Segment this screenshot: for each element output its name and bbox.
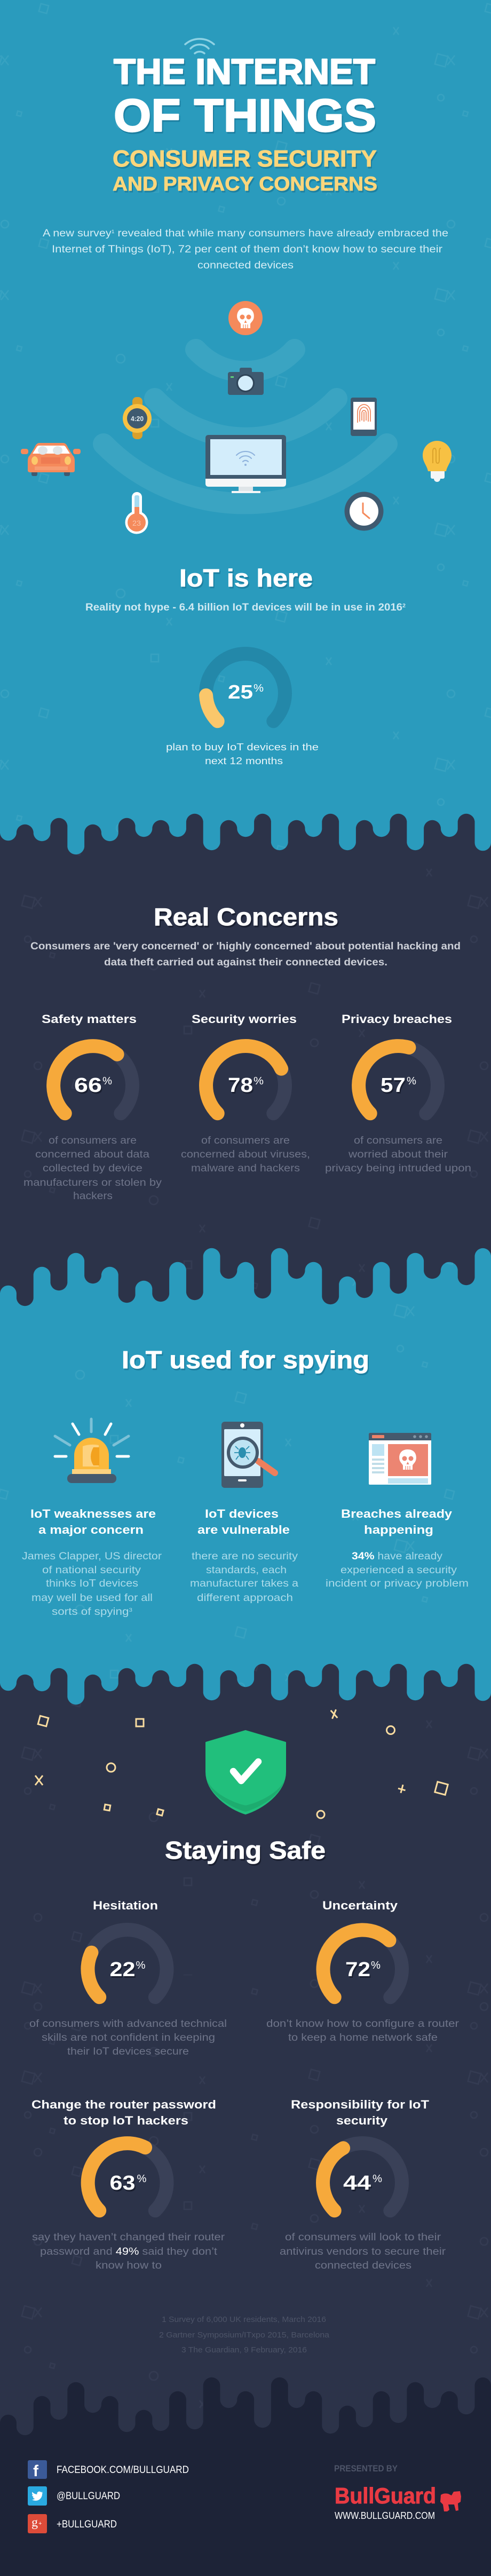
icon: thermometer: 23 bbox=[132, 519, 141, 527]
gauge: 57 percent: % bbox=[407, 1075, 416, 1087]
text: concerns intro bbox=[30, 941, 461, 968]
gauge: 72 percent: % bbox=[371, 1960, 381, 1971]
subtitle line 2: AND PRIVACY CONCERNS bbox=[113, 173, 377, 195]
intro text: revealed that while many consumers have already embraced the bbox=[114, 228, 448, 239]
description bbox=[181, 1135, 310, 1174]
panel: IoT devices vulnerable bbox=[190, 1422, 298, 1604]
gauge: 72 percent bbox=[323, 1930, 402, 1997]
heading: Uncertainty bbox=[322, 1899, 398, 1912]
text: plan to buy bbox=[166, 742, 319, 766]
text: concerns intro: Consumers are 'very concerned' or 'highly concerned' about potential hacking and bbox=[30, 941, 461, 952]
subtitle bbox=[113, 146, 377, 195]
description: collected by device bbox=[43, 1163, 142, 1174]
gauge: 22 percent: % bbox=[136, 1960, 146, 1971]
gauge: 25 percent: % bbox=[254, 683, 264, 694]
icon: thermometer bbox=[125, 492, 148, 534]
footnotes: 3 The Guardian, 9 February, 2016 bbox=[181, 2345, 307, 2355]
social: google plus: +BULLGUARD bbox=[57, 2519, 117, 2530]
description: say they haven’t changed their router bbox=[32, 2232, 225, 2243]
heading: IoT used for spying: IoT used for spying bbox=[122, 1346, 369, 1374]
heading: Privacy breaches bbox=[342, 1012, 452, 1026]
icon: car bbox=[21, 443, 81, 476]
intro text bbox=[43, 228, 448, 271]
gauge: 66 percent bbox=[53, 1046, 132, 1113]
panel: footer background with drips bbox=[0, 2377, 491, 2576]
heading bbox=[341, 1507, 453, 1536]
description: 3 bbox=[129, 1607, 133, 1613]
heading: Safety matters bbox=[42, 1012, 137, 1026]
heading: to stop IoT hackers bbox=[64, 2114, 188, 2127]
description bbox=[280, 2232, 446, 2271]
description: of national security bbox=[42, 1565, 141, 1576]
gauge: 66 percent: % bbox=[102, 1075, 112, 1087]
panel: teal header background bbox=[0, 0, 491, 907]
icon: light bulb bbox=[423, 441, 452, 482]
description: privacy being intruded upon bbox=[325, 1163, 471, 1174]
description: of consumers will look to their bbox=[285, 2232, 441, 2243]
heading: IoT devices bbox=[205, 1507, 279, 1520]
description: thinks IoT devices bbox=[46, 1578, 138, 1589]
intro text: A new survey bbox=[43, 228, 103, 239]
gauge: 22 percent bbox=[88, 1930, 167, 1997]
description: manufacturers or stolen by bbox=[23, 1177, 162, 1188]
social: google plus: + bbox=[38, 2520, 42, 2527]
panel: uncertainty bbox=[266, 1899, 460, 2043]
icon: phone with magnifier bbox=[221, 1422, 275, 1488]
social: facebook bbox=[28, 2460, 189, 2480]
heading: security bbox=[336, 2114, 388, 2127]
description bbox=[266, 2018, 460, 2043]
wifi arcs bbox=[104, 350, 387, 503]
panel: responsibility bbox=[280, 2098, 446, 2271]
text: reality not hype: Reality not hype - 6.4 billion IoT devices will be in use in 2016 bbox=[85, 602, 381, 613]
footnotes: 2 Gartner Symposium/ITxpo 2015, Barcelona bbox=[159, 2331, 330, 2340]
subtitle line 1: CONSUMER SECURITY bbox=[113, 146, 377, 172]
panel: dark staying safe background with drips bbox=[0, 1664, 491, 2508]
gauge: 44 percent: % bbox=[373, 2173, 382, 2185]
description: to keep a home network safe bbox=[288, 2032, 438, 2043]
description: standards, each bbox=[206, 1565, 287, 1576]
heading: Breaches already bbox=[341, 1507, 453, 1520]
icon: shield with check bbox=[206, 1731, 286, 1814]
icon: smart watch bbox=[123, 397, 152, 439]
heading bbox=[197, 1507, 290, 1536]
heading: a major concern bbox=[38, 1523, 144, 1536]
presented by: PRESENTED BY bbox=[334, 2463, 398, 2474]
footnotes: 1 Survey of 6,000 UK residents, March 2016 bbox=[162, 2315, 326, 2324]
intro text: connected devices bbox=[197, 260, 294, 271]
heading: IoT is here: IoT is here bbox=[179, 564, 313, 592]
description bbox=[29, 2018, 227, 2057]
text: concerns intro: data theft carried out against their connected devices. bbox=[104, 957, 387, 968]
social: google plus: g bbox=[31, 2516, 38, 2530]
heading: Change the router password bbox=[31, 2098, 216, 2111]
icon: title wifi bbox=[185, 39, 214, 53]
description bbox=[190, 1551, 298, 1604]
url: WWW.BULLGUARD.COM bbox=[335, 2510, 435, 2521]
gauge: 57 percent bbox=[359, 1046, 438, 1113]
description: of consumers are bbox=[201, 1135, 290, 1146]
description: malware and hackers bbox=[191, 1163, 300, 1174]
description: James Clapper, US director bbox=[22, 1551, 162, 1562]
icon: browser with skull bbox=[369, 1433, 431, 1485]
icon: siren bbox=[55, 1419, 129, 1483]
icon: smart watch: 4:20 bbox=[131, 415, 144, 423]
gauge: 22 percent: 22 bbox=[110, 1959, 136, 1981]
description: concerned about viruses, bbox=[181, 1149, 310, 1160]
gauge: 44 percent bbox=[323, 2143, 402, 2210]
heading: IoT weaknesses are bbox=[30, 1507, 156, 1520]
description bbox=[23, 1135, 162, 1202]
description bbox=[22, 1551, 162, 1618]
gauge: 63 percent bbox=[88, 2143, 167, 2210]
gauge: 63 percent: % bbox=[137, 2173, 147, 2185]
gauge: 78 percent: 78 bbox=[228, 1074, 253, 1097]
gauge: 25 percent: 25 bbox=[228, 681, 253, 703]
heading: Security worries bbox=[192, 1012, 297, 1026]
description bbox=[325, 1135, 471, 1174]
panel: breaches happening bbox=[326, 1433, 469, 1589]
title line: The Internet: THE INTERNET bbox=[114, 52, 375, 92]
description: know how to bbox=[96, 2260, 162, 2271]
description: sorts of spying bbox=[52, 1606, 117, 1618]
gauge: 66 percent: 66 bbox=[74, 1074, 102, 1097]
decorative confetti shapes bbox=[35, 1709, 448, 1818]
title line: Of Things: OF THINGS bbox=[114, 90, 376, 141]
logo: BullGuard: BullGuard bbox=[335, 2483, 436, 2508]
footnotes bbox=[159, 2315, 330, 2355]
heading: Responsibility for IoT bbox=[291, 2098, 430, 2111]
icon: monitor with wifi bbox=[205, 435, 286, 493]
text: plan to buy: next 12 months bbox=[205, 756, 283, 766]
icon: clock bbox=[345, 492, 383, 530]
icon: camera bbox=[228, 368, 264, 395]
heading bbox=[31, 2098, 216, 2127]
intro text: 1 bbox=[112, 229, 114, 234]
gauge: 78 percent: % bbox=[254, 1075, 264, 1087]
description: of consumers with advanced technical bbox=[29, 2018, 227, 2030]
description: different approach bbox=[197, 1592, 293, 1604]
description: don’t know how to configure a router bbox=[266, 2018, 460, 2030]
description: worried about their bbox=[348, 1149, 448, 1160]
social: twitter bbox=[28, 2486, 120, 2506]
gauge: 63 percent: 63 bbox=[110, 2172, 136, 2194]
icon: skull badge bbox=[228, 301, 263, 335]
panel: change router password bbox=[31, 2098, 225, 2271]
text: reality not hype: 2 bbox=[402, 603, 406, 609]
heading bbox=[30, 1507, 156, 1536]
social: facebook: f bbox=[33, 2462, 39, 2480]
description: incident or privacy problem bbox=[326, 1578, 469, 1589]
panel: security worries bbox=[181, 1012, 310, 1174]
social: facebook: FACEBOOK.COM/BULLGUARD bbox=[57, 2464, 189, 2476]
heading: Hesitation bbox=[93, 1899, 158, 1912]
text: plan to buy: plan to buy IoT devices in the bbox=[166, 742, 319, 752]
description: their IoT devices secure bbox=[67, 2046, 189, 2057]
social: twitter: @BULLGUARD bbox=[57, 2491, 120, 2502]
description bbox=[326, 1551, 469, 1589]
description: antivirus vendors to secure their bbox=[280, 2246, 446, 2257]
title bbox=[114, 52, 376, 141]
gauge: 78 percent bbox=[206, 1046, 285, 1113]
gauge: 25 percent bbox=[206, 654, 285, 721]
description bbox=[32, 2232, 225, 2271]
gauge: 57 percent: 57 bbox=[381, 1074, 406, 1097]
heading: happening bbox=[364, 1523, 433, 1536]
description: manufacturer takes a bbox=[190, 1578, 298, 1589]
panel: dark concerns background with drips bbox=[0, 814, 491, 1334]
icon: phone with fingerprint bbox=[351, 398, 377, 436]
heading: are vulnerable bbox=[197, 1523, 290, 1536]
description: of consumers are bbox=[49, 1135, 137, 1146]
description: may well be used for all bbox=[31, 1592, 153, 1604]
panel: privacy breaches bbox=[325, 1012, 471, 1174]
description: experienced a security bbox=[340, 1565, 457, 1576]
panel: hesitation bbox=[29, 1899, 227, 2057]
description: password and 49% said they don’t bbox=[40, 2246, 218, 2257]
icon: bulldog bbox=[440, 2491, 461, 2511]
panel: IoT weaknesses bbox=[22, 1419, 162, 1618]
heading bbox=[291, 2098, 430, 2127]
social: google plus bbox=[28, 2514, 117, 2533]
intro text: Internet of Things (IoT), 72 per cent of them don’t know how to secure their bbox=[52, 244, 443, 255]
description: hackers bbox=[73, 1191, 113, 1202]
description: connected devices bbox=[315, 2260, 411, 2271]
illustration: connected devices bbox=[21, 301, 452, 534]
panel: safety matters bbox=[23, 1012, 162, 1202]
panel: teal spying background with drips bbox=[0, 1248, 491, 1761]
description: of consumers are bbox=[354, 1135, 442, 1146]
gauge: 72 percent: 72 bbox=[345, 1959, 370, 1981]
heading: Real Concerns: Real Concerns bbox=[154, 903, 338, 931]
heading: Staying Safe: Staying Safe bbox=[165, 1836, 326, 1864]
description: skills are not confident in keeping bbox=[42, 2032, 215, 2043]
gauge: 44 percent: 44 bbox=[343, 2172, 371, 2194]
description: 34% have already bbox=[352, 1551, 443, 1562]
description: concerned about data bbox=[35, 1149, 150, 1160]
description: there are no security bbox=[192, 1551, 298, 1562]
